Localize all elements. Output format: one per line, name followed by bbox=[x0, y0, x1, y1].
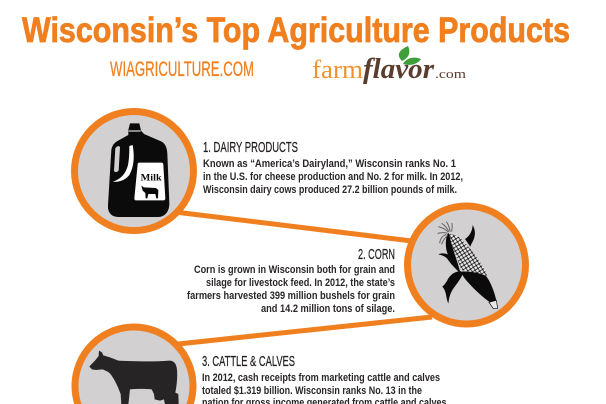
connector line 2 to 3 bbox=[178, 317, 432, 344]
website link: WIAGRICULTURE.COM bbox=[110, 58, 254, 81]
body: In 2012, cash receipts from marketing cattle and calves bbox=[202, 372, 440, 384]
icon: corn cob bbox=[438, 222, 498, 309]
icon circle bbox=[408, 206, 526, 324]
logo: farmflavor: .com bbox=[435, 66, 466, 81]
heading: 2. CORN bbox=[358, 246, 395, 263]
body: Wisconsin dairy cows produced 27.2 billion pounds of milk. bbox=[203, 184, 457, 196]
body bbox=[203, 158, 463, 196]
panel: cattle icon bbox=[75, 327, 193, 404]
body: silage for livestock feed. In 2012, the state’s bbox=[206, 277, 395, 289]
connector line 1 to 2 bbox=[175, 212, 412, 241]
body: and 14.2 million tons of silage. bbox=[261, 303, 395, 315]
text: cattle and calves bbox=[202, 353, 449, 404]
body: Known as “America’s Dairyland,” Wisconsin ranks No. 1 bbox=[203, 158, 456, 170]
logo: farmflavor bbox=[312, 46, 466, 85]
body bbox=[187, 264, 395, 315]
text: corn bbox=[187, 246, 395, 315]
heading: 3. CATTLE & CALVES bbox=[202, 353, 295, 370]
body bbox=[202, 372, 449, 404]
logo: farmflavor: farm bbox=[312, 55, 363, 84]
icon circle bbox=[74, 112, 194, 230]
panel: corn icon bbox=[408, 206, 526, 324]
body: in the U.S. for cheese production and No. 2 for milk. In 2012, bbox=[203, 171, 463, 183]
body: farmers harvested 399 million bushels for grain bbox=[187, 290, 395, 302]
panel: dairy icon bbox=[74, 112, 194, 230]
body: totaled $1.319 billion. Wisconsin ranks No. 13 in the bbox=[202, 385, 422, 397]
icon: milk jug: Milk bbox=[141, 173, 162, 183]
heading: 1. DAIRY PRODUCTS bbox=[203, 139, 298, 156]
logo: farmflavor: flavor bbox=[363, 53, 435, 85]
text: dairy products bbox=[203, 139, 463, 196]
icon: cow bbox=[89, 351, 179, 404]
icon circle bbox=[75, 327, 193, 404]
body: Corn is grown in Wisconsin both for grain and bbox=[194, 264, 395, 276]
